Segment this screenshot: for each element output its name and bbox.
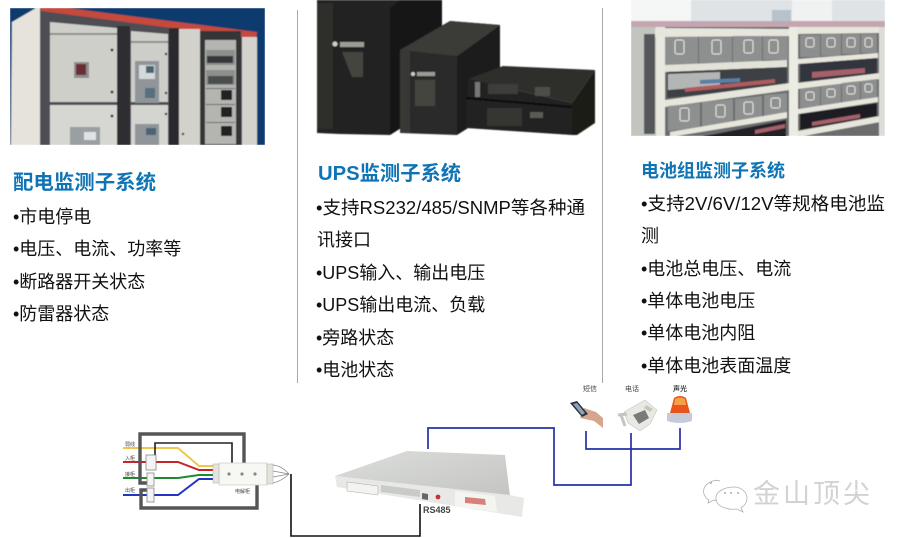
connector: blue lines bbox=[428, 428, 680, 485]
list: battery items: •单体电池电压 bbox=[641, 291, 755, 311]
heading: power distribution: 配电监测子系统 bbox=[13, 170, 156, 194]
icon: mobile phone, SMS: 短信 bbox=[583, 384, 597, 393]
battery rows: left rack bbox=[665, 36, 790, 137]
heading: battery: 电池组监测子系统 bbox=[641, 160, 785, 181]
wire labels: 入柜 bbox=[125, 455, 135, 462]
list: power distribution items: •电压、电流、功率等 bbox=[13, 239, 181, 259]
sensor box bbox=[213, 463, 289, 485]
photo: battery racks bbox=[631, 0, 885, 137]
list: UPS items: •UPS输出电流、负载 bbox=[316, 295, 485, 315]
panel: UPS subsystem bbox=[316, 161, 585, 380]
label: RS485: RS485 bbox=[423, 505, 451, 515]
list: UPS items: •UPS输入、输出电压 bbox=[316, 263, 485, 283]
wire labels: 弱线 bbox=[125, 441, 135, 448]
wire labels bbox=[125, 441, 250, 495]
heading: UPS: UPS监测子系统 bbox=[318, 161, 461, 185]
icon: alarm beacon bbox=[667, 384, 692, 423]
list: UPS items: •电池状态 bbox=[316, 360, 394, 380]
list: UPS items bbox=[316, 198, 585, 380]
wire labels: 电解柜 bbox=[235, 488, 250, 495]
list: UPS items: •旁路状态 bbox=[316, 328, 394, 348]
list: battery items bbox=[641, 194, 885, 376]
list: battery items: •单体电池内阻 bbox=[641, 323, 755, 343]
watermark: WeChat logo and name: 金山顶尖 bbox=[753, 479, 870, 509]
divider: left bbox=[297, 10, 298, 383]
icon: telephone: 电话 bbox=[625, 384, 639, 393]
diagram: sensor wiring bbox=[123, 434, 289, 508]
list: power distribution items: •断路器开关状态 bbox=[13, 272, 145, 292]
icon: telephone bbox=[618, 384, 657, 431]
battery rows: right rack bbox=[798, 34, 880, 137]
list: UPS items: •支持RS232/485/SNMP等各种通 bbox=[316, 198, 585, 218]
list: power distribution items: •市电停电 bbox=[13, 207, 91, 227]
divider: right bbox=[602, 8, 603, 383]
device: monitoring host bbox=[335, 451, 524, 517]
icon: mobile phone, SMS bbox=[570, 384, 603, 428]
connector: black RS485 line bbox=[291, 474, 420, 536]
list: battery items: •单体电池表面温度 bbox=[641, 356, 791, 376]
watermark: WeChat logo and name bbox=[703, 479, 870, 512]
wire labels: 接柜 bbox=[125, 471, 135, 478]
list: battery items: •支持2V/6V/12V等规格电池监 bbox=[641, 194, 885, 214]
list: UPS items: 讯接口 bbox=[317, 230, 371, 250]
panel: battery subsystem bbox=[641, 160, 885, 376]
panel: power distribution subsystem bbox=[13, 170, 181, 324]
photo: power distribution cabinet bbox=[10, 8, 265, 145]
list: power distribution items bbox=[13, 207, 181, 324]
list: battery items: 测 bbox=[641, 226, 659, 246]
icon: alarm beacon: 声光 bbox=[673, 384, 687, 393]
list: battery items: •电池总电压、电流 bbox=[641, 259, 791, 279]
list: power distribution items: •防雷器状态 bbox=[13, 304, 109, 324]
wire labels: 出柜 bbox=[125, 487, 135, 494]
photo: UPS units bbox=[317, 0, 595, 135]
